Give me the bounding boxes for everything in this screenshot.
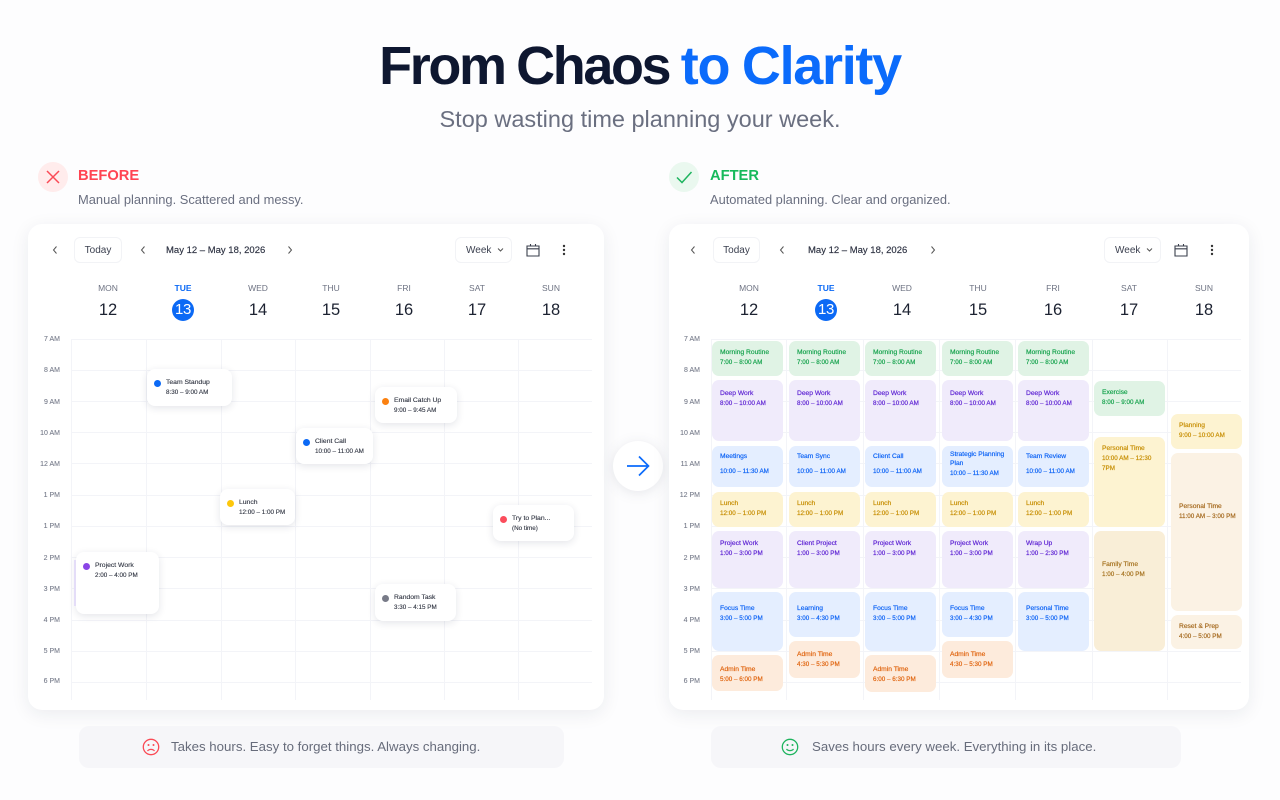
day headers [98,283,560,321]
day headers: TUE [818,283,834,293]
time axis: 5 PM [44,648,60,655]
column: wednesday: Client Call [873,453,903,460]
day headers: SAT [1121,283,1137,293]
day headers: 14 [249,301,267,319]
column: saturday: 10:00 AM – 12:30 [1102,455,1151,462]
column: thursday: Deep Work [950,390,983,397]
title: From Chaos to Clarity [379,36,901,96]
day headers: THU [322,283,340,293]
column: saturday: Personal Time [1102,445,1145,452]
column: thursday: 1:00 – 3:00 PM [950,550,993,557]
column: wednesday: Focus Time [873,605,908,612]
column: saturday [1094,381,1165,651]
column: monday: 10:00 – 11:30 AM [720,468,769,475]
event: project work: 2:00 – 4:00 PM [95,572,138,579]
column: tuesday: Morning Routine [797,349,846,356]
date range: May 12 – May 18, 2026 [166,244,265,256]
previous week chevron [140,246,145,254]
column: friday: 1:00 – 2:30 PM [1026,550,1069,557]
column: sunday: 11:00 AM – 3:00 PM [1179,513,1236,520]
column: tuesday: Client Project [797,540,837,547]
column: sunday: 9:00 – 10:00 AM [1179,432,1225,439]
column: thursday: 4:30 – 5:30 PM [950,661,993,668]
column: friday: Wrap Up [1026,540,1052,547]
column: friday: 12:00 – 1:00 PM [1026,510,1072,517]
column: monday: 3:00 – 5:00 PM [720,615,763,622]
day headers: 15 [969,301,987,319]
week selector [455,237,512,263]
column: thursday: 12:00 – 1:00 PM [950,510,996,517]
event: try to plan: Try to Plan... [512,515,550,522]
time axis: 11 AM [681,461,700,468]
time axis: 3 PM [684,586,700,593]
column: wednesday: 8:00 – 10:00 AM [873,400,919,407]
day headers: 17 [1120,301,1138,319]
column: wednesday: Morning Routine [873,349,922,356]
column: wednesday: 1:00 – 3:00 PM [873,550,916,557]
column: friday: Morning Routine [1026,349,1075,356]
column: monday: Deep Work [720,390,753,397]
time axis: 8 AM [684,367,700,374]
column: tuesday: Admin Time [797,651,832,658]
column: saturday: 8:00 – 9:00 AM [1102,399,1144,406]
column: monday: Project Work [720,540,758,547]
time axis: 4 PM [44,617,60,624]
column: monday [712,341,783,691]
day headers: 13 [175,301,191,318]
day headers: 18 [542,301,560,319]
panel: before calendar [28,224,604,710]
column: tuesday: Team Sync [797,453,830,460]
event: email catch up: Email Catch Up [394,397,441,404]
icon: after check [669,162,699,192]
column: wednesday [865,341,936,692]
column: thursday: Focus Time [950,605,985,612]
column: monday: Focus Time [720,605,755,612]
column: sunday: Planning [1179,422,1205,429]
calendar grid [71,339,592,700]
event: team standup [147,369,232,406]
time axis: 12 AM [40,461,60,468]
day headers: MON [739,283,759,293]
column: thursday: Morning Routine [950,349,999,356]
callout text: Saves hours every week. Everything in its place. [812,739,1096,754]
day headers: 12 [99,301,117,319]
column: tuesday: Deep Work [797,390,830,397]
column: wednesday: 3:00 – 5:00 PM [873,615,916,622]
column: wednesday: Lunch [873,500,891,507]
time axis: 9 AM [684,399,700,406]
column: monday: 12:00 – 1:00 PM [720,510,766,517]
icon: calendar [1174,244,1188,256]
day headers: 13 [818,301,834,318]
icon: happy face [782,738,798,756]
day headers: 14 [893,301,911,319]
time axis: 3 PM [44,586,60,593]
column: friday: 8:00 – 10:00 AM [1026,400,1072,407]
calendar grid [711,339,1241,700]
column: friday: Lunch [1026,500,1044,507]
column: tuesday: 4:30 – 5:30 PM [797,661,840,668]
previous week chevron [780,246,784,254]
day headers: 16 [395,301,413,319]
day headers: THU [969,283,987,293]
event: random task [375,584,456,621]
column: sunday: Personal Time [1179,503,1222,510]
panel: after calendar [669,224,1249,710]
day headers: 17 [468,301,486,319]
event: project work: Project Work [95,562,134,569]
date range: May 12 – May 18, 2026 [808,244,907,256]
time axis: 10 AM [40,430,60,437]
day headers: WED [248,283,268,293]
column: wednesday: 6:00 – 6:30 PM [873,676,916,683]
event: try to plan: (No time) [512,525,538,532]
column: tuesday: 8:00 – 10:00 AM [797,400,843,407]
column: wednesday: 10:00 – 11:00 AM [873,468,922,475]
callout text: Takes hours. Easy to forget things. Always changing. [171,739,480,754]
event: try to plan [493,505,574,541]
today button [713,237,760,263]
toolbar back chevron [52,246,57,254]
column: saturday: Exercise [1102,389,1128,396]
event: client call: 10:00 – 11:00 AM [315,448,364,455]
column: monday: 7:00 – 8:00 AM [720,359,762,366]
today button: Today [723,245,750,256]
callout: after [711,726,1181,768]
column: wednesday: 7:00 – 8:00 AM [873,359,915,366]
day headers: SAT [469,283,485,293]
icon: calendar [526,244,540,256]
time axis: 2 PM [684,555,700,562]
time axis: 7 AM [684,336,700,343]
column: sunday: 4:00 – 5:00 PM [1179,633,1222,640]
time axis: 1 PM [44,492,60,499]
column: monday: 1:00 – 3:00 PM [720,550,763,557]
toolbar back chevron [690,246,695,254]
day headers: 16 [1044,301,1062,319]
column: tuesday: Lunch [797,500,815,507]
column: saturday: 1:00 – 4:00 PM [1102,571,1145,578]
time axis: 1 PM [44,523,60,530]
day headers: FRI [1046,283,1060,293]
column: wednesday: Admin Time [873,666,908,673]
column: tuesday: 7:00 – 8:00 AM [797,359,839,366]
event: client call [296,428,373,464]
column: thursday: Lunch [950,500,968,507]
time axis: 4 PM [684,617,700,624]
column: friday: 7:00 – 8:00 AM [1026,359,1068,366]
event: random task: 3:30 – 4:15 PM [394,604,437,611]
column: tuesday: Learning [797,605,823,612]
next week chevron [931,246,936,254]
column: monday: 8:00 – 10:00 AM [720,400,766,407]
event: team standup: 8:30 – 9:00 AM [166,389,208,396]
column: thursday [942,341,1013,678]
column: saturday: Family Time [1102,561,1138,568]
column: sunday [1171,414,1242,649]
icon: more [1210,244,1214,256]
time axis: 7 AM [44,336,60,343]
event: lunch: Lunch [239,499,258,506]
column: monday: Lunch [720,500,738,507]
subtitle: Stop wasting time planning your week. [439,106,841,132]
day headers: TUE [174,283,192,293]
column: thursday: Admin Time [950,651,985,658]
column: wednesday: 12:00 – 1:00 PM [873,510,919,517]
column: monday: Admin Time [720,666,755,673]
time axis: 1 PM [684,523,700,530]
callout: before [79,726,564,768]
column: thursday: Plan [950,460,963,466]
after description: Automated planning. Clear and organized. [710,192,951,207]
column: monday: Meetings [720,453,747,460]
week selector: Week [466,245,491,256]
column: thursday: 7:00 – 8:00 AM [950,359,992,366]
column: sunday: Reset & Prep [1179,623,1219,630]
day headers: MON [98,283,118,293]
column: saturday: 7PM [1102,465,1115,472]
before heading: BEFORE [78,168,139,184]
today button: Today [85,245,111,256]
column: wednesday: Project Work [873,540,911,547]
event: team standup: Team Standup [166,379,210,386]
time axis: 8 AM [44,367,60,374]
column: tuesday: 1:00 – 3:00 PM [797,550,840,557]
day headers: WED [892,283,912,293]
event: lunch [220,489,295,525]
icon: sad face [142,738,160,756]
day headers: FRI [397,283,411,293]
week selector: Week [1115,245,1140,256]
time axis: 10 AM [680,430,700,437]
event: random task: Random Task [394,594,435,601]
day headers: 12 [740,301,758,319]
column: friday: Personal Time [1026,605,1069,612]
column: tuesday: 12:00 – 1:00 PM [797,510,843,517]
column: tuesday: 10:00 – 11:00 AM [797,468,846,475]
time axis [40,336,60,685]
next week chevron [288,246,292,254]
column: thursday: Strategic Planning [950,451,1004,458]
event: client call: Client Call [315,438,346,445]
column: friday: 10:00 – 11:00 AM [1026,468,1075,475]
column: friday: 3:00 – 5:00 PM [1026,615,1069,622]
column: thursday: 10:00 – 11:30 AM [950,470,999,477]
after heading: AFTER [710,168,759,184]
event: email catch up: 9:00 – 9:45 AM [394,407,436,414]
time axis: 6 PM [44,678,60,685]
column: friday [1018,341,1089,651]
time axis: 12 PM [680,492,700,499]
time axis: 5 PM [684,648,700,655]
day headers: SUN [1195,283,1213,293]
column: thursday: Project Work [950,540,988,547]
icon: more [562,244,566,256]
day headers: 18 [1195,301,1213,319]
column: wednesday: Deep Work [873,390,906,397]
day headers: SUN [542,283,560,293]
time axis: 6 PM [684,678,700,685]
column: friday: Deep Work [1026,390,1059,397]
time axis: 2 PM [44,555,60,562]
before description: Manual planning. Scattered and messy. [78,192,303,207]
time axis [680,336,700,685]
today button [74,237,122,263]
column: tuesday: 3:00 – 4:30 PM [797,615,840,622]
column: monday: Morning Routine [720,349,769,356]
column: thursday: 8:00 – 10:00 AM [950,400,996,407]
column: tuesday [789,341,860,678]
column: monday: 5:00 – 6:00 PM [720,676,763,683]
event: lunch: 12:00 – 1:00 PM [239,509,285,516]
event: email catch up [375,387,457,423]
column: friday: Team Review [1026,453,1066,460]
day headers [739,283,1213,321]
arrow: before to after [612,453,664,494]
time axis: 9 AM [44,399,60,406]
column: thursday: 3:00 – 4:30 PM [950,615,993,622]
week selector [1104,237,1161,263]
event: project work [76,552,159,614]
icon: before cross [38,162,68,192]
day headers: 15 [322,301,340,319]
